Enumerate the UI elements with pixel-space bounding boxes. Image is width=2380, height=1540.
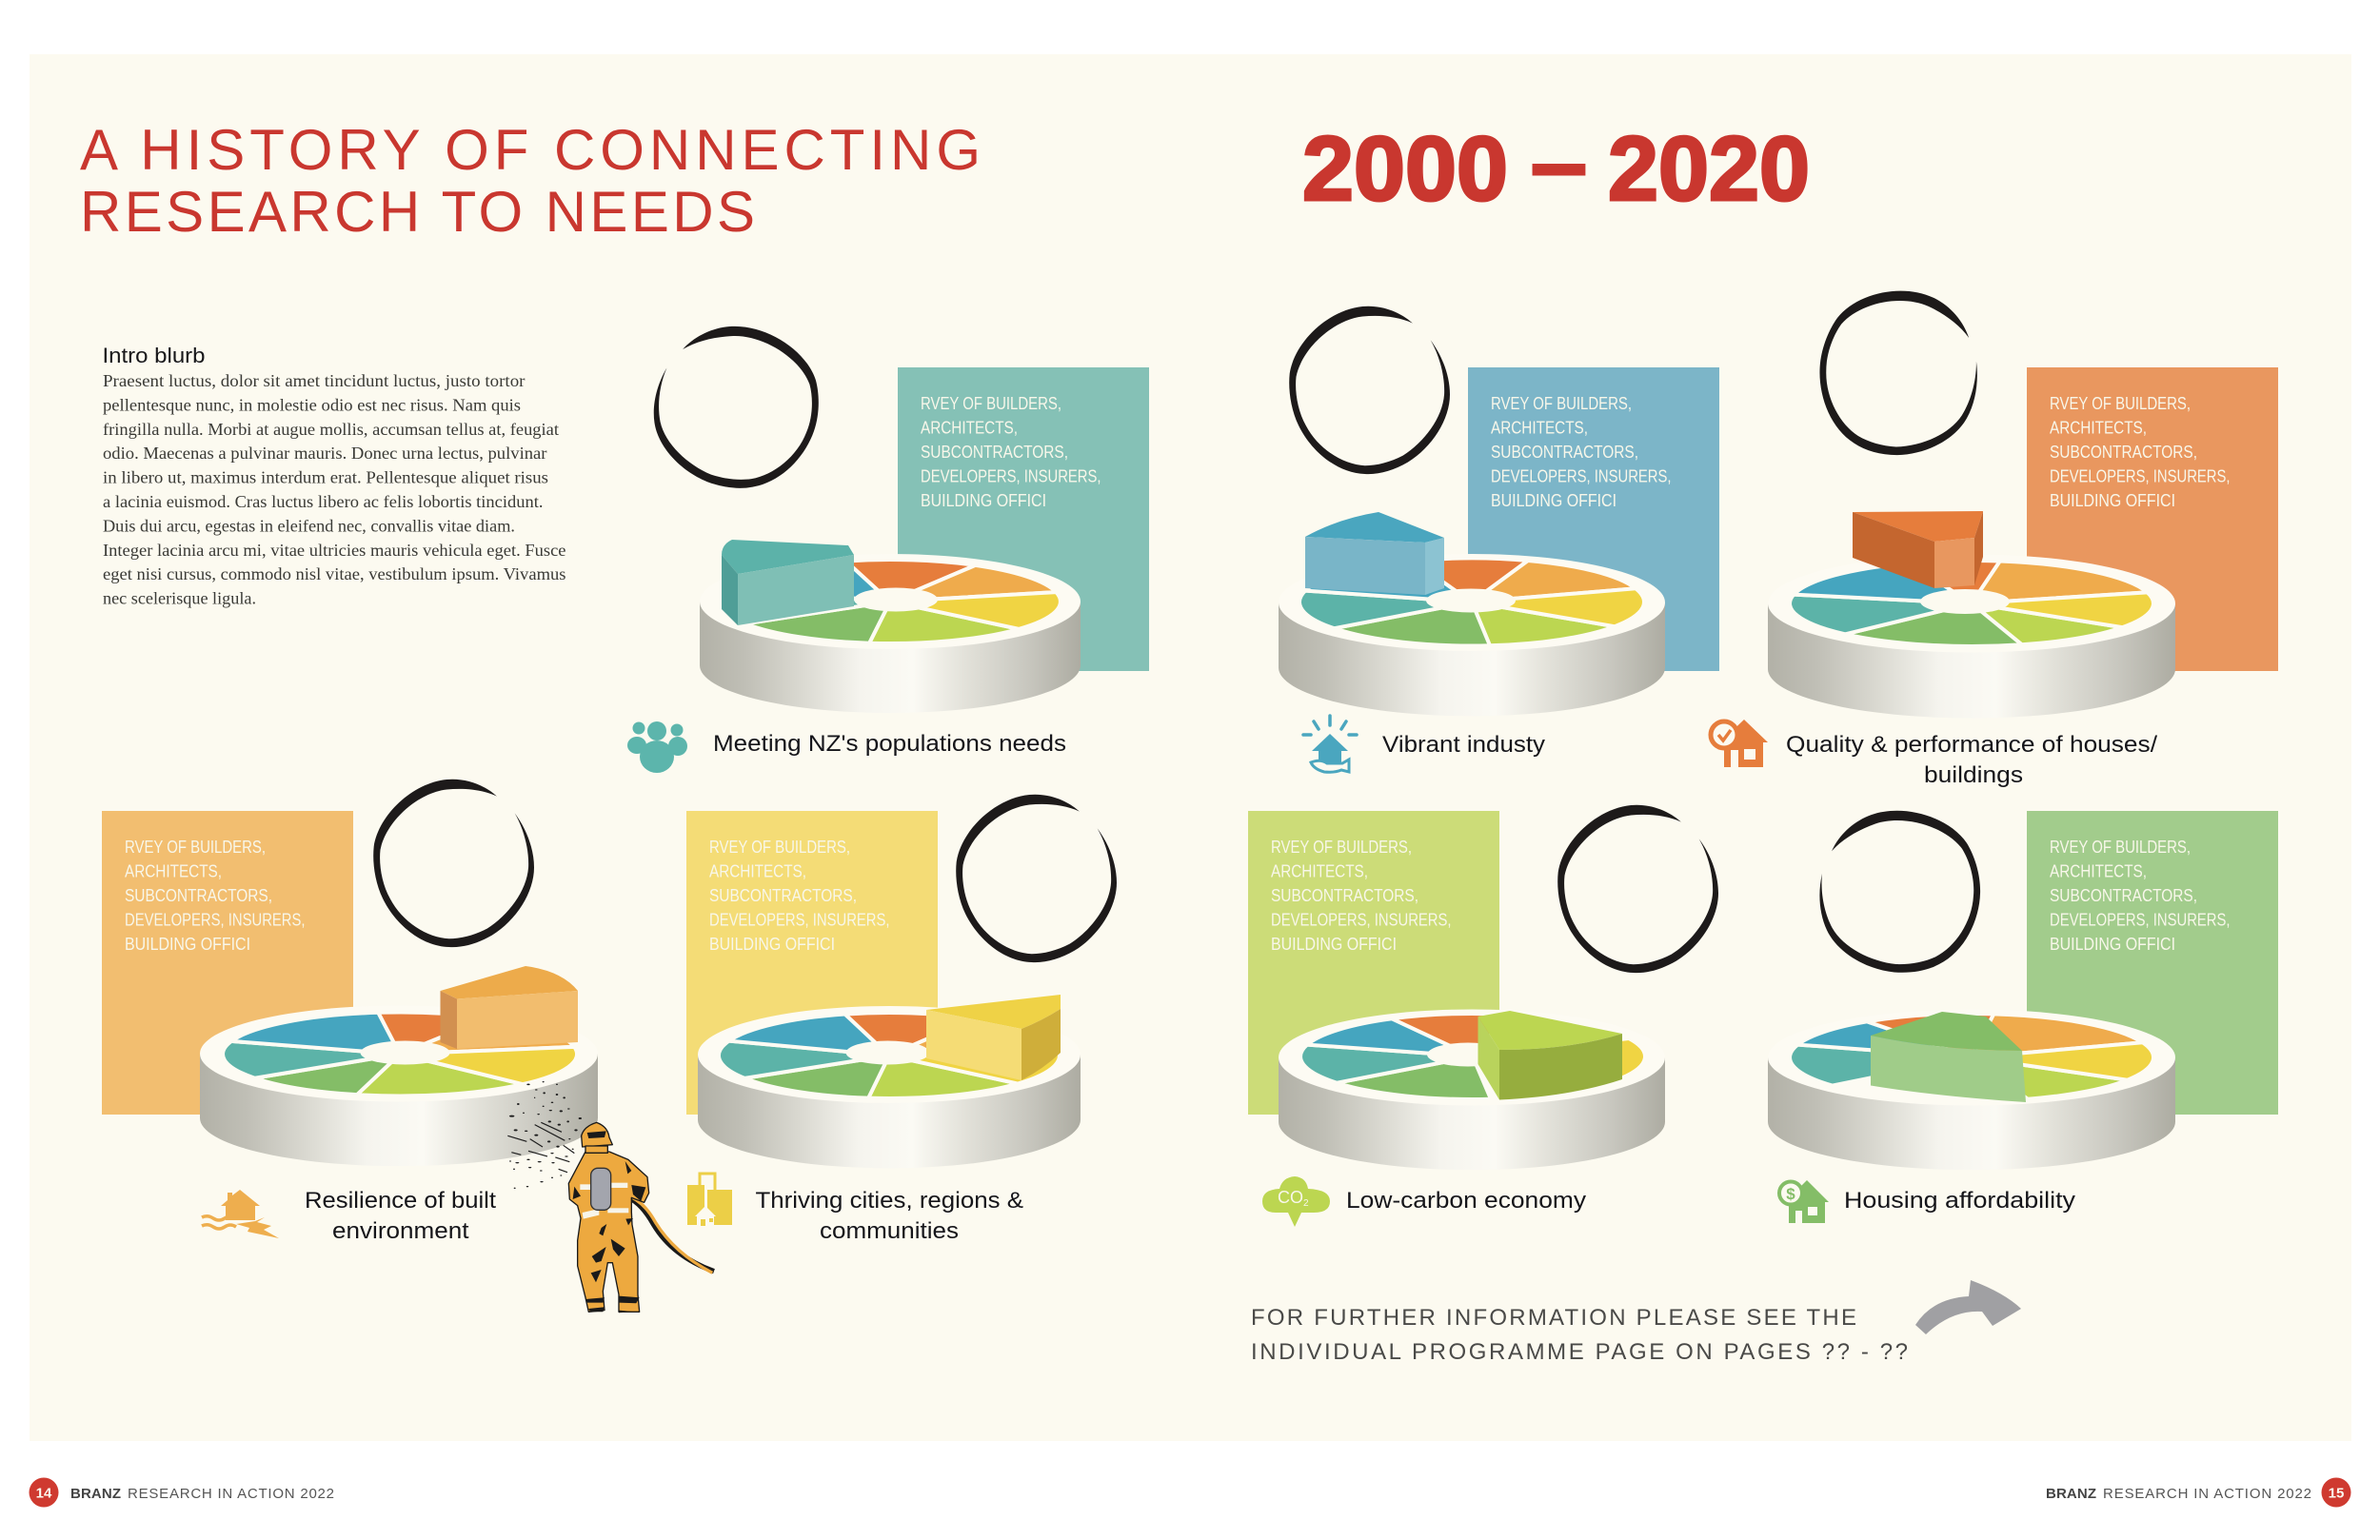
- colour card: amber: DEVELOPERS, INSURERS,: [125, 910, 305, 929]
- text block: intro blurb: a lacinia euismod. Cras luctus libero ac felis lobortis tincidunt.: [103, 492, 543, 511]
- footer: right: 15: [2329, 1485, 2344, 1502]
- pie chart: [1768, 511, 2175, 719]
- icon: house with dollar: $: [1786, 1185, 1795, 1203]
- panel: thriving cities: [686, 795, 1117, 1244]
- text block: intro blurb: nec scelerisque ligula.: [103, 589, 256, 608]
- label: Resilience of built: [305, 1188, 496, 1214]
- label: environment: [332, 1218, 469, 1244]
- text block: intro blurb: odio. Maecenas a pulvinar mauris. Donec urna lectus, pulvinar: [103, 444, 546, 463]
- colour card: teal: ARCHITECTS,: [921, 419, 1018, 438]
- ink circle: [1289, 306, 1450, 474]
- label: Housing affordability: [1844, 1188, 2075, 1214]
- colour card: lime: SUBCONTRACTORS,: [1271, 886, 1418, 905]
- panel: meeting NZ's populations needs: [627, 316, 1149, 773]
- colour card: green: BUILDING OFFICI: [2050, 935, 2175, 954]
- pie chart: [700, 540, 1081, 713]
- colour card: orange: ARCHITECTS,: [2050, 419, 2147, 438]
- footer: left: 14: [36, 1485, 52, 1502]
- ink circle: [1790, 783, 2010, 1000]
- colour card: teal: [898, 367, 1149, 671]
- pie chart: [1279, 1009, 1665, 1170]
- text block: further information: FOR FURTHER INFORMATION PLEASE SEE THE: [1251, 1305, 1856, 1331]
- icon: rising house in hand: [1303, 716, 1357, 772]
- label: [756, 1188, 1023, 1244]
- panel: vibrant industry: [1279, 306, 1719, 772]
- panel: low-carbon economy: [1248, 805, 1718, 1227]
- label: [305, 1188, 496, 1244]
- ink circle: [643, 316, 830, 499]
- air tank: [591, 1168, 611, 1210]
- colour card: blue: BUILDING OFFICI: [1491, 491, 1616, 510]
- icon: house with dollar: [1779, 1180, 1829, 1223]
- colour card: green: [2027, 811, 2278, 1115]
- heading: date range: [1302, 112, 1810, 220]
- label: communities: [820, 1218, 959, 1244]
- footer: left: [29, 1477, 334, 1508]
- footer: right: RESEARCH IN ACTION 2022: [2103, 1486, 2311, 1502]
- colour card: green: DEVELOPERS, INSURERS,: [2050, 910, 2230, 929]
- colour card: green: SUBCONTRACTORS,: [2050, 886, 2197, 905]
- text block: intro blurb: Intro blurb: [103, 344, 206, 367]
- colour card: blue: RVEY OF BUILDERS,: [1491, 394, 1632, 413]
- colour card: orange: BUILDING OFFICI: [2050, 491, 2175, 510]
- colour card: orange: RVEY OF BUILDERS,: [2050, 394, 2191, 413]
- raised wedge: amber: [440, 966, 578, 1049]
- text block: further information: INDIVIDUAL PROGRAMME PAGE ON PAGES ?? - ??: [1251, 1339, 1908, 1365]
- heading: date range: 2020: [1608, 118, 1810, 220]
- colour card: blue: ARCHITECTS,: [1491, 419, 1588, 438]
- colour card: green: RVEY OF BUILDERS,: [2050, 838, 2191, 857]
- arrow: [1915, 1280, 2021, 1334]
- title: A HISTORY OF CONNECTING: [80, 118, 981, 182]
- icon: house with flood and lightning: [202, 1190, 279, 1238]
- colour card: yellow: ARCHITECTS,: [709, 862, 806, 881]
- heading: date range: –: [1531, 112, 1587, 214]
- colour card: amber: BUILDING OFFICI: [125, 935, 250, 954]
- colour card: teal: RVEY OF BUILDERS,: [921, 394, 1061, 413]
- icon: city buildings: [687, 1174, 732, 1226]
- ink circle: [1788, 260, 2010, 487]
- label: Low-carbon economy: [1346, 1188, 1586, 1214]
- icon: certified house: [1711, 720, 1768, 767]
- text block: further information: [1251, 1305, 1908, 1365]
- body: [568, 1122, 649, 1312]
- pie chart: [1768, 1009, 2175, 1170]
- illustration: firefighter with hose: [507, 1081, 714, 1313]
- panel: quality and performance: [1711, 260, 2278, 788]
- colour card: lime: BUILDING OFFICI: [1271, 935, 1397, 954]
- colour card: green: ARCHITECTS,: [2050, 862, 2147, 881]
- colour card: teal: DEVELOPERS, INSURERS,: [921, 466, 1101, 485]
- heading: date range: 2000: [1302, 118, 1508, 220]
- text block: intro blurb: in libero ut, maximus interdum erat. Pellentesque aliquet risus: [103, 468, 548, 487]
- ink circle: [373, 780, 534, 947]
- text block: intro blurb: pellentesque nunc, in molestie odio est nec risus. Nam quis: [103, 395, 521, 414]
- label: Vibrant industy: [1382, 732, 1545, 758]
- colour card: yellow: SUBCONTRACTORS,: [709, 886, 857, 905]
- ink circle: [1557, 805, 1718, 973]
- label: Quality & performance of houses/: [1786, 732, 2157, 758]
- colour card: amber: ARCHITECTS,: [125, 862, 222, 881]
- footer: left: RESEARCH IN ACTION 2022: [128, 1486, 334, 1502]
- label: Meeting NZ's populations needs: [713, 731, 1066, 757]
- colour card: yellow: DEVELOPERS, INSURERS,: [709, 910, 889, 929]
- text block: intro blurb: Duis dui arcu, egestas in eleifend nec, convallis vitae diam.: [103, 516, 515, 535]
- colour card: lime: RVEY OF BUILDERS,: [1271, 838, 1412, 857]
- text block: intro blurb: Praesent luctus, dolor sit amet tincidunt luctus, justo tortor: [103, 371, 526, 390]
- raised wedge: green: [1871, 1012, 2026, 1102]
- footer: right: BRANZ: [2046, 1486, 2096, 1502]
- pie chart: [200, 966, 598, 1166]
- reflective stripes: [580, 1183, 628, 1219]
- raised wedge: yellow: [926, 995, 1061, 1080]
- ink circle: [956, 795, 1117, 962]
- title: [80, 118, 981, 244]
- text block: intro blurb: fringilla nulla. Morbi at augue mollis, accumsan tellus at, feugiat: [103, 420, 559, 439]
- colour card: yellow: BUILDING OFFICI: [709, 935, 835, 954]
- colour card: lime: DEVELOPERS, INSURERS,: [1271, 910, 1451, 929]
- raised wedge: blue: [1305, 512, 1444, 595]
- colour card: blue: DEVELOPERS, INSURERS,: [1491, 466, 1672, 485]
- panel: resilience of built environment: [102, 780, 598, 1244]
- pie chart: [1279, 512, 1665, 716]
- label: [1786, 732, 2157, 788]
- panel: housing affordability: [1768, 783, 2278, 1223]
- text block: intro blurb: eget nisi cursus, commodo nisl vitae, vestibulum ipsum. Vivamus: [103, 564, 565, 583]
- icon: CO2 cloud: [1262, 1176, 1330, 1227]
- colour card: yellow: RVEY OF BUILDERS,: [709, 838, 850, 857]
- colour card: teal: SUBCONTRACTORS,: [921, 443, 1068, 462]
- title: RESEARCH TO NEEDS: [80, 180, 755, 244]
- pie chart: [698, 995, 1081, 1168]
- raised wedge: lime: [1478, 1011, 1622, 1100]
- colour card: orange: [2027, 367, 2278, 671]
- colour card: blue: SUBCONTRACTORS,: [1491, 443, 1638, 462]
- colour card: amber: SUBCONTRACTORS,: [125, 886, 272, 905]
- icon: CO2 cloud: 2: [1303, 1198, 1309, 1209]
- water spray: [507, 1081, 582, 1189]
- colour card: yellow: [686, 811, 938, 1115]
- colour card: lime: ARCHITECTS,: [1271, 862, 1368, 881]
- footer: left: BRANZ: [70, 1486, 121, 1502]
- colour card: amber: RVEY OF BUILDERS,: [125, 838, 266, 857]
- label: Thriving cities, regions &: [756, 1188, 1023, 1214]
- footer: right: [2046, 1477, 2351, 1508]
- text block: intro blurb: [103, 344, 566, 608]
- text block: intro blurb: Integer lacinia arcu mi, vitae ultricies mauris vehicula eget. Fusce: [103, 541, 566, 560]
- icon: CO2 cloud: CO: [1278, 1188, 1303, 1207]
- colour card: orange: SUBCONTRACTORS,: [2050, 443, 2197, 462]
- raised wedge: teal: [722, 540, 854, 625]
- colour card: teal: BUILDING OFFICI: [921, 491, 1046, 510]
- raised wedge: orange: [1853, 511, 1983, 588]
- hose: [627, 1195, 714, 1273]
- colour card: orange: DEVELOPERS, INSURERS,: [2050, 466, 2230, 485]
- colour card: blue: [1468, 367, 1719, 671]
- label: buildings: [1924, 762, 2023, 788]
- icon: people: [627, 721, 687, 773]
- dark folds: [573, 1131, 645, 1313]
- colour card: lime: [1248, 811, 1499, 1115]
- colour card: amber: [102, 811, 353, 1115]
